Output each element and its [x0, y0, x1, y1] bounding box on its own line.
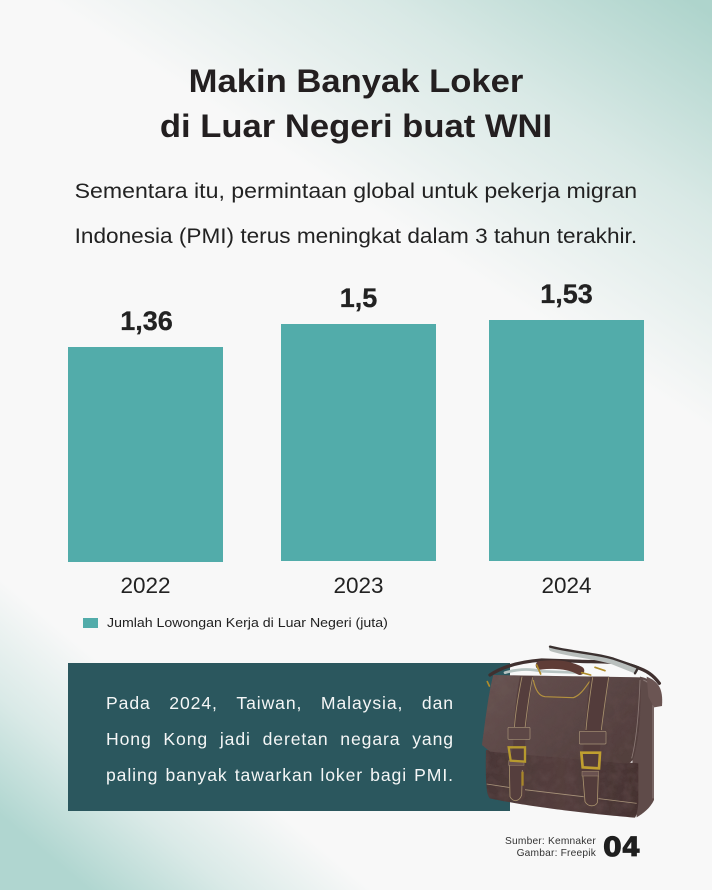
callout text: jadi [220, 729, 251, 749]
year label 2024: 2024 [541, 573, 592, 598]
value label 2024: 1,53 [540, 279, 593, 309]
legend label: Jumlah Lowongan Kerja di Luar Negeri (juta) [107, 615, 388, 630]
source credit: Gambar: Freepik [517, 848, 596, 859]
right strap [579, 677, 609, 806]
callout text: PMI. [414, 765, 454, 785]
callout text: yang [412, 729, 454, 749]
callout text: loker [320, 765, 363, 785]
title: Makin Banyak Loker [189, 63, 523, 99]
callout text: bagi [370, 765, 407, 785]
callout text: Hong [106, 729, 152, 749]
source credit [505, 836, 596, 859]
intro text [75, 178, 637, 248]
year label 2023: 2023 [333, 573, 384, 598]
bar chart [68, 279, 644, 598]
icon: leather briefcase [482, 646, 662, 818]
bag body [486, 750, 638, 818]
left strap [508, 676, 533, 801]
bar 2022 [68, 347, 223, 562]
callout text: negara [340, 729, 400, 749]
callout text: banyak [165, 765, 228, 785]
callout text: Taiwan, [236, 693, 302, 713]
callout text: Malaysia, [321, 693, 403, 713]
flap [482, 675, 641, 763]
title [160, 63, 552, 144]
callout text: deretan [263, 729, 329, 749]
callout text: Kong [163, 729, 208, 749]
stitching [487, 677, 640, 803]
callout panel [68, 663, 510, 811]
callout text: tawarkan [235, 765, 313, 785]
source credit: Sumber: Kemnaker [505, 836, 596, 847]
callout text: Pada [106, 693, 151, 713]
title: di Luar Negeri buat WNI [160, 108, 552, 144]
intro text: Sementara itu, permintaan global untuk pekerja migran [75, 178, 637, 203]
value label 2023: 1,5 [340, 283, 377, 313]
bar 2024 [489, 320, 644, 561]
side gusset [630, 677, 654, 817]
bar 2023 [281, 324, 436, 561]
callout text: dan [422, 693, 454, 713]
intro text: Indonesia (PMI) terus meningkat dalam 3 tahun terakhir. [75, 223, 637, 248]
callout text: 2024, [169, 693, 218, 713]
handle and strap [487, 647, 659, 704]
value label 2022: 1,36 [120, 306, 173, 336]
callout text: paling [106, 765, 158, 785]
page number: 04 [603, 832, 641, 863]
callout text [106, 693, 454, 785]
legend [83, 615, 388, 630]
legend swatch [83, 618, 98, 628]
year label 2022: 2022 [120, 573, 171, 598]
